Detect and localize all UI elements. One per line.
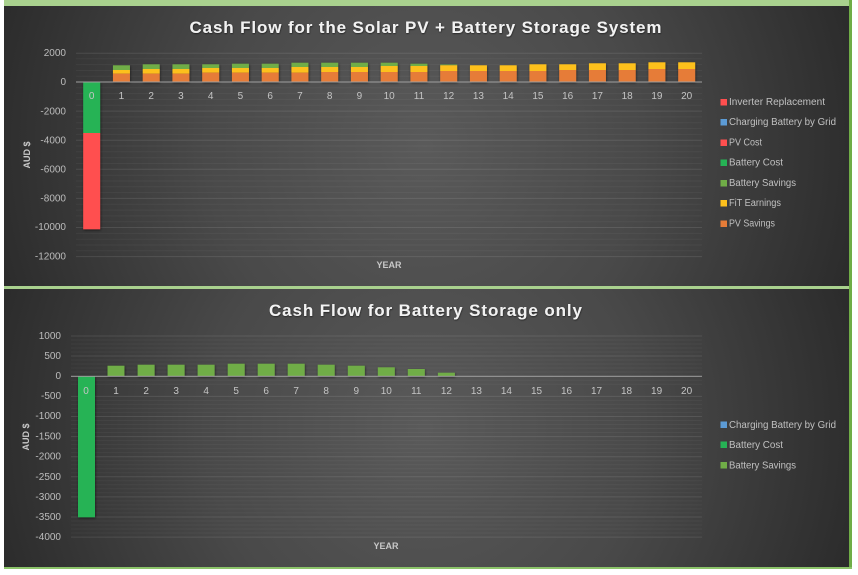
panel: solar PV + battery cash flow (4, 6, 849, 286)
legend: solar chart: PV Cost (729, 138, 762, 148)
x axis labels: battery chart: 0 (83, 386, 89, 397)
x axis title: solar chart: YEAR (376, 260, 402, 270)
y axis labels: battery chart: -2500 (35, 472, 61, 483)
x axis labels: battery chart: 12 (441, 386, 452, 397)
legend: battery chart: Battery Cost (729, 440, 783, 451)
y axis labels: battery chart: -1500 (35, 432, 61, 442)
y axis title: solar chart: AUD $ (22, 141, 32, 169)
panel: battery storage only cash flow (4, 289, 849, 567)
x axis labels: solar chart: 12 (443, 91, 455, 102)
year 0 bar: battery cost and PV cost (83, 82, 100, 229)
y axis labels: battery chart: -3000 (35, 492, 61, 503)
x axis labels: solar chart: 8 (327, 91, 333, 102)
y axis labels: solar chart: -10000 (35, 222, 66, 233)
years 1 to 12 battery savings bars (108, 364, 455, 376)
x axis labels: solar chart: 14 (503, 91, 514, 102)
x axis labels: battery chart: 6 (263, 386, 269, 397)
y axis labels: solar chart (35, 48, 66, 262)
x axis labels: battery chart: 17 (591, 386, 602, 397)
legend: battery chart: Charging Battery by Grid (729, 420, 836, 431)
legend: solar chart: Battery Savings (729, 178, 796, 189)
y axis labels: solar chart: -12000 (35, 252, 66, 262)
x axis labels: solar chart: 5 (238, 91, 244, 102)
y axis labels: solar chart: 0 (60, 77, 66, 88)
x axis labels: solar chart: 7 (297, 91, 303, 102)
x axis labels: solar chart: 10 (384, 91, 395, 102)
x axis labels: battery chart: 1 (113, 386, 119, 397)
x axis labels: battery chart: 7 (293, 386, 299, 397)
legend: solar chart: Inverter Replacement (729, 97, 825, 108)
y axis labels: battery chart: 1000 (39, 331, 61, 342)
legend: battery chart (720, 420, 836, 472)
x axis labels: battery chart: 16 (561, 386, 572, 397)
x axis labels: solar chart: 18 (622, 91, 633, 102)
x axis title: battery chart: YEAR (373, 541, 399, 551)
x axis labels: solar chart: 1 (119, 91, 125, 102)
legend: solar chart: FiT Earnings (729, 198, 781, 209)
legend: battery chart: Battery Savings (729, 460, 796, 472)
x axis labels: battery chart: 19 (651, 386, 663, 397)
x axis labels: solar chart: 13 (473, 91, 484, 102)
y axis labels: battery chart: -3500 (35, 512, 61, 523)
x axis labels: battery chart (83, 386, 693, 397)
x axis labels: battery chart: 13 (471, 386, 482, 397)
x axis labels: battery chart: 9 (354, 386, 360, 397)
x axis labels: battery chart: 4 (203, 386, 209, 397)
x axis labels: solar chart: 16 (562, 91, 574, 102)
y axis labels: battery chart: 500 (44, 351, 61, 362)
y axis labels: solar chart: -6000 (40, 164, 66, 176)
years 1 to 20 stacked bars (113, 62, 695, 82)
y axis labels: solar chart: -4000 (40, 136, 66, 146)
x axis labels: battery chart: 2 (143, 386, 149, 397)
y axis labels: battery chart: 0 (55, 371, 61, 382)
x axis labels: battery chart: 8 (323, 386, 329, 397)
x axis labels: battery chart: 10 (381, 386, 392, 397)
x axis labels: solar chart: 9 (357, 91, 363, 102)
bar chart: battery storage (78, 364, 455, 517)
x axis labels: solar chart (89, 91, 693, 102)
x axis labels: solar chart: 11 (414, 91, 425, 102)
x axis labels: solar chart: 4 (208, 91, 214, 102)
chart title: battery storage only: Cash Flow for Battery Storage only (269, 301, 583, 320)
y axis title: battery chart: AUD $ (21, 423, 31, 451)
stacked bar chart: solar PV + battery (83, 62, 695, 229)
y axis labels: solar chart: -8000 (40, 194, 66, 204)
x axis labels: battery chart: 5 (233, 386, 239, 397)
x axis labels: solar chart: 20 (681, 91, 693, 102)
y axis labels: solar chart: 2000 (44, 48, 66, 59)
x axis labels: battery chart: 20 (681, 386, 693, 397)
legend: solar chart (720, 97, 836, 230)
y axis labels: battery chart: -2000 (35, 452, 61, 462)
legend: solar chart: Charging Battery by Grid (729, 117, 836, 128)
chart title: solar PV + battery: Cash Flow for the Solar PV + Battery Storage System (190, 18, 662, 37)
x axis labels: battery chart: 3 (173, 386, 179, 397)
x axis labels: battery chart: 14 (501, 386, 512, 397)
x axis labels: battery chart: 11 (411, 386, 422, 397)
x axis labels: solar chart: 3 (178, 91, 184, 102)
legend: solar chart: PV Savings (729, 218, 775, 230)
x axis labels: solar chart: 0 (89, 91, 95, 102)
x axis labels: battery chart: 18 (621, 386, 632, 397)
x axis labels: solar chart: 19 (651, 91, 663, 102)
x axis labels: solar chart: 6 (267, 91, 273, 102)
y axis labels: solar chart: -2000 (40, 106, 66, 118)
y axis labels: battery chart (35, 331, 61, 543)
x axis labels: solar chart: 15 (532, 91, 544, 102)
legend: solar chart: Battery Cost (729, 158, 783, 168)
y axis labels: battery chart: -500 (41, 391, 61, 402)
x axis labels: battery chart: 15 (531, 386, 542, 397)
x axis labels: solar chart: 2 (148, 91, 154, 102)
x axis labels: solar chart: 17 (592, 91, 603, 102)
y axis labels: battery chart: -1000 (35, 411, 61, 422)
y axis labels: battery chart: -4000 (35, 532, 61, 543)
year 0 bar: battery cost (78, 376, 95, 517)
